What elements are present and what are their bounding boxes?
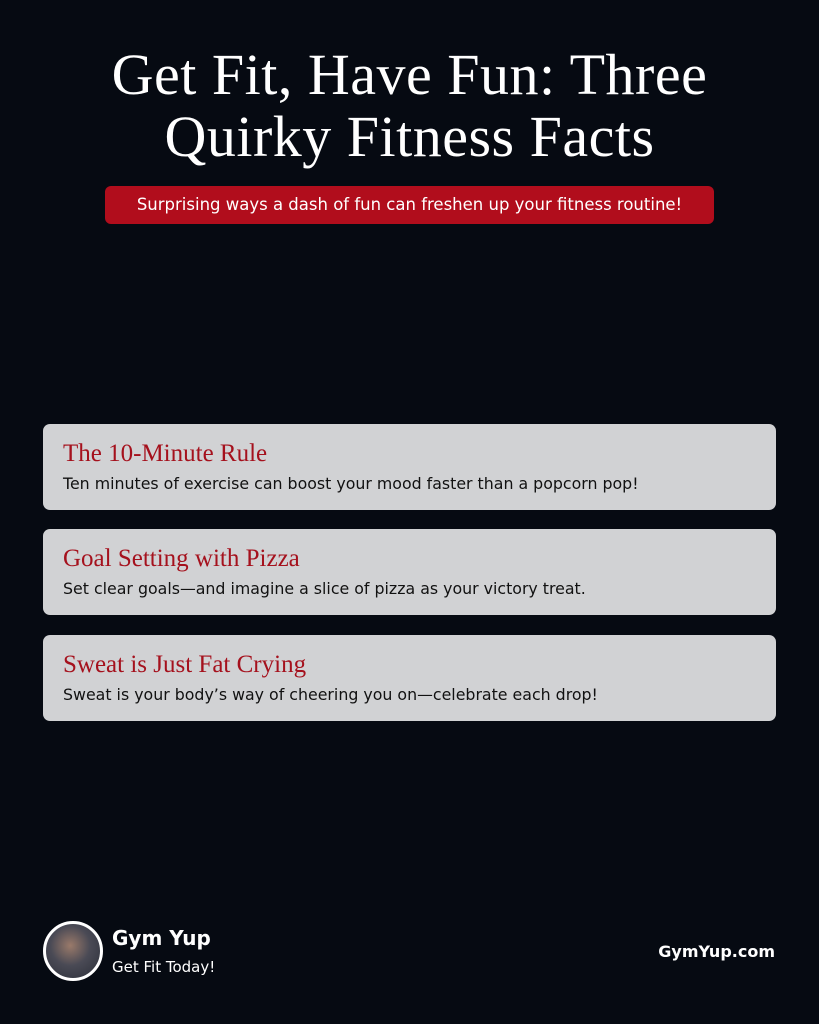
- card: goal setting: [43, 529, 776, 615]
- card: goal setting: Set clear goals—and imagine a slice of pizza as your victory treat.: [63, 579, 586, 598]
- card: 10-minute rule: Ten minutes of exercise can boost your mood faster than a popcorn pop!: [63, 474, 639, 493]
- website: GymYup.com: [658, 942, 775, 961]
- subtitle banner: Surprising ways a dash of fun can freshen up your fitness routine!: [137, 195, 682, 214]
- subtitle banner: [105, 186, 714, 224]
- title: Quirky Fitness Facts: [164, 104, 655, 169]
- card: sweat: [43, 635, 776, 721]
- card: goal setting: Goal Setting with Pizza: [63, 545, 300, 572]
- tagline: Get Fit Today!: [112, 958, 215, 976]
- card: sweat: Sweat is your body’s way of cheering you on—celebrate each drop!: [63, 685, 598, 704]
- icon: avatar: [43, 921, 103, 981]
- card: 10-minute rule: [43, 424, 776, 510]
- title: [112, 42, 707, 169]
- card: 10-minute rule: The 10-Minute Rule: [63, 440, 267, 467]
- title: Get Fit, Have Fun: Three: [112, 42, 707, 107]
- brand name: Gym Yup: [112, 926, 211, 950]
- card: sweat: Sweat is Just Fat Crying: [63, 651, 306, 678]
